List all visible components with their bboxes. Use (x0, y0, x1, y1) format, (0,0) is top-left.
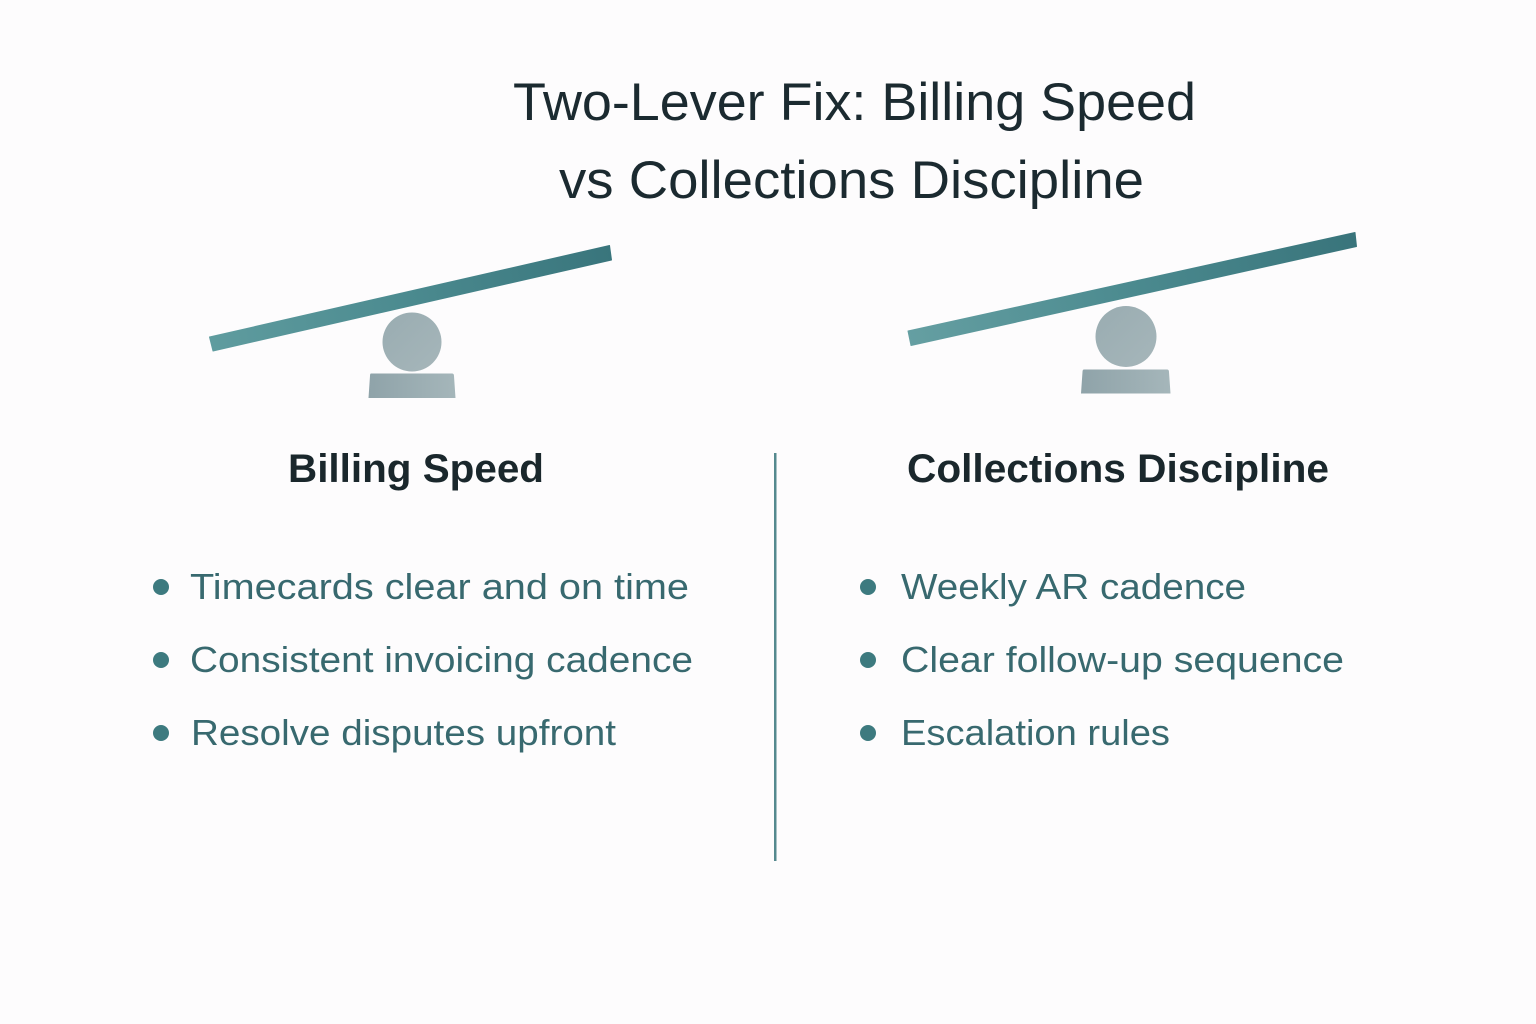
bullet item 2: Consistent invoicing cadence (190, 639, 693, 680)
bullet item 1: Weekly AR cadence (901, 566, 1246, 607)
title: Two-Lever Fix: Billing Speed (513, 73, 1196, 132)
lever beam: right (908, 232, 1356, 346)
icon: left lever balance (210, 246, 612, 398)
bullet item 3: Escalation rules (901, 712, 1170, 753)
title: vs Collections Discipline (559, 151, 1144, 210)
list: Billing Speed (153, 566, 693, 753)
heading: Billing Speed: Billing Speed (288, 447, 544, 491)
list: Collections Discipline (860, 566, 1344, 753)
fulcrum base: left (368, 374, 456, 398)
heading: Collections Discipline: Collections Discipline (907, 447, 1329, 491)
title (513, 73, 1196, 210)
icon: right lever balance (908, 232, 1356, 394)
center divider (774, 453, 776, 861)
fulcrum ball: left (382, 312, 442, 372)
fulcrum base: right (1081, 370, 1170, 394)
bullet item 3: Resolve disputes upfront (191, 712, 616, 753)
bullet item 2: Clear follow-up sequence (901, 639, 1344, 680)
bullet item 1: Timecards clear and on time (190, 566, 689, 607)
fulcrum ball: right (1096, 306, 1156, 367)
lever beam: left (210, 246, 612, 351)
